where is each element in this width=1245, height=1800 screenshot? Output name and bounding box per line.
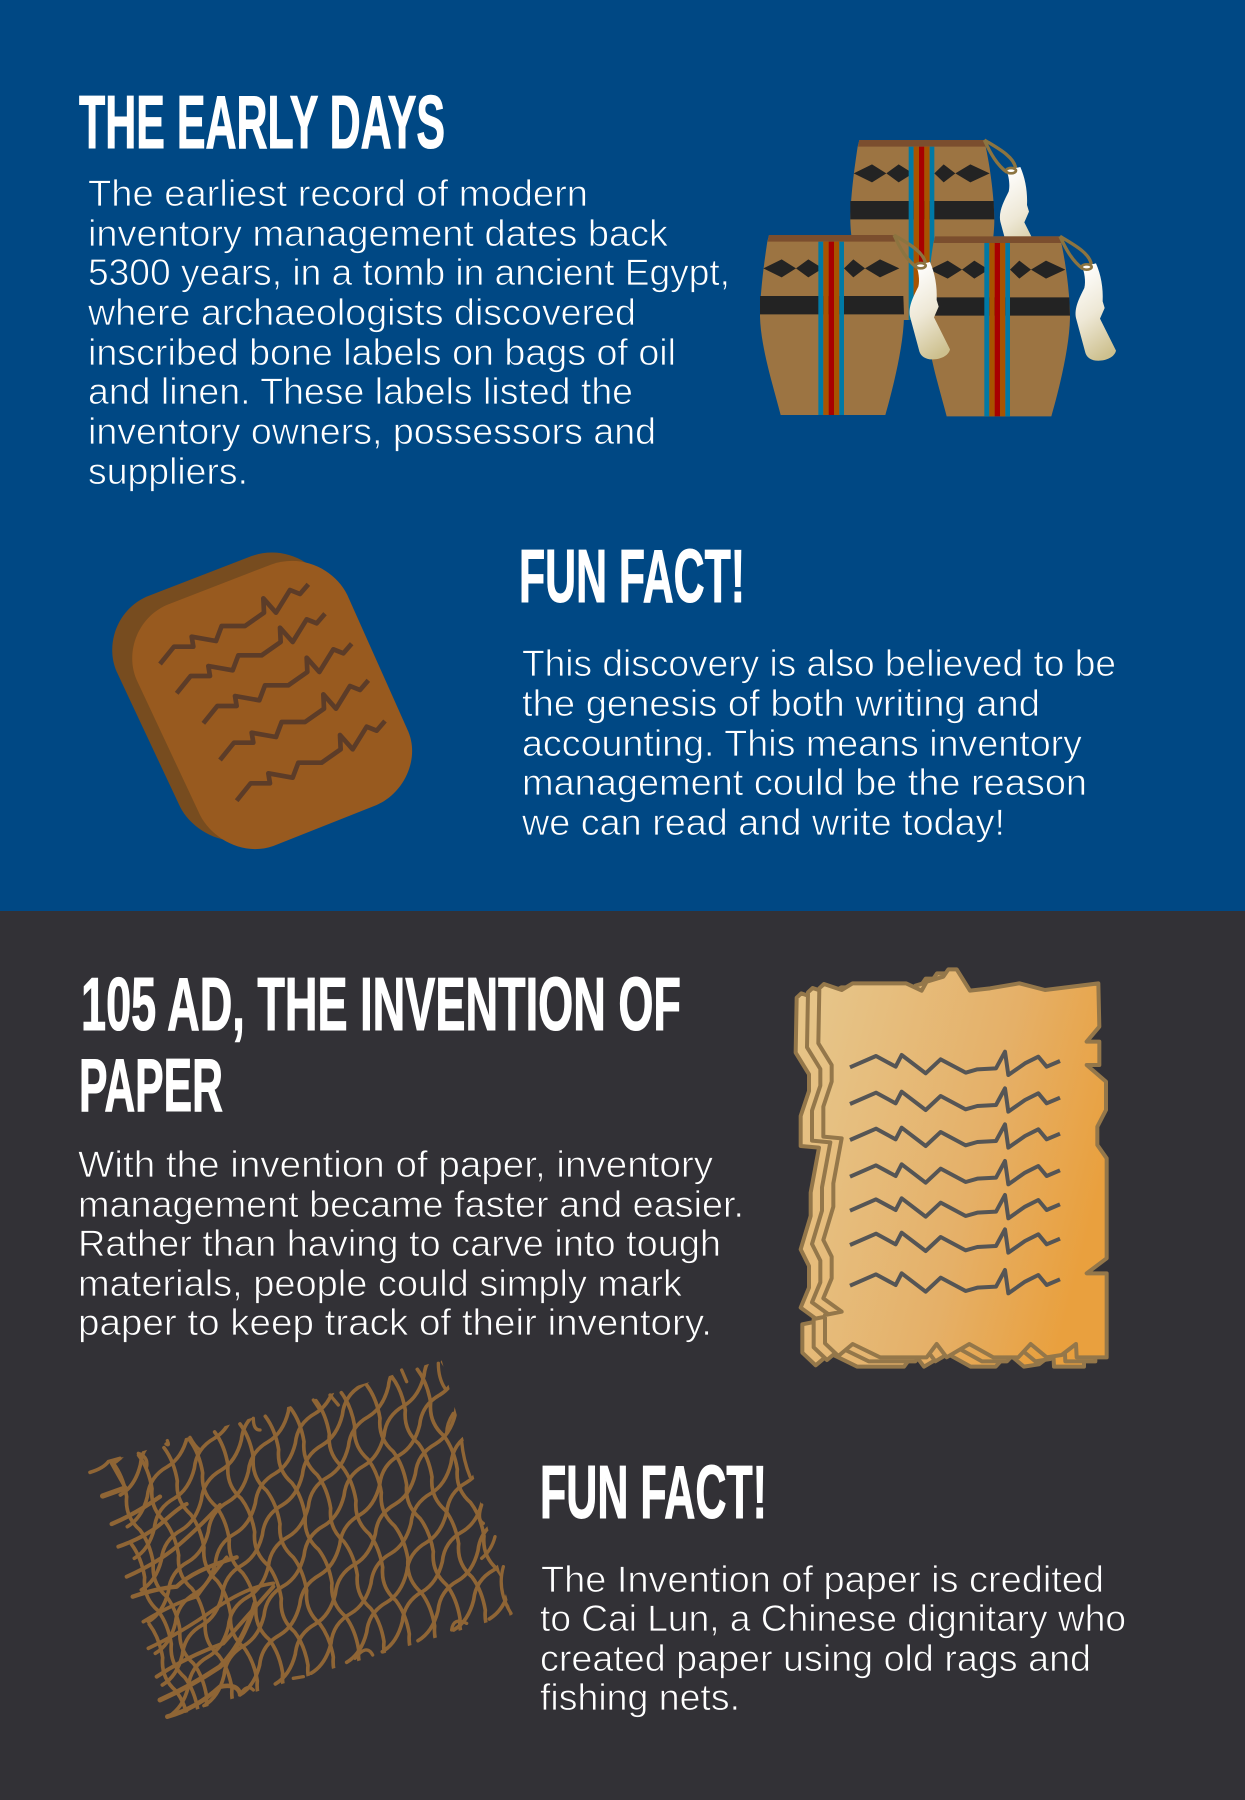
- text block: fun fact 1: [521, 643, 1116, 843]
- text block: fun fact 2: to Cai Lun, a Chinese dignitary who: [540, 1598, 1126, 1639]
- heading: 105 AD, the invention of paper: PAPER: [79, 1043, 223, 1127]
- panel: invention of paper (dark background): [0, 911, 1245, 1800]
- text block: earliest record: inscribed bone labels on bags of oil: [88, 332, 676, 373]
- text block: earliest record: inventory owners, possessors and: [88, 411, 656, 452]
- text block: fun fact 2: [540, 1559, 1126, 1718]
- text block: invention of paper: paper to keep track of their inventory.: [78, 1302, 712, 1343]
- text block: fun fact 1: management could be the reason: [522, 762, 1087, 803]
- text block: earliest record: 5300 years, in a tomb in ancient Egypt,: [88, 252, 730, 293]
- text block: fun fact 1: This discovery is also believed to be: [522, 643, 1116, 684]
- text block: invention of paper: management became faster and easier.: [78, 1184, 744, 1225]
- text block: earliest record: suppliers.: [88, 451, 248, 492]
- text block: fun fact 2: fishing nets.: [540, 1677, 740, 1718]
- text block: invention of paper: With the invention of paper, inventory: [78, 1144, 714, 1185]
- text block: earliest record: inventory management dates back: [88, 213, 669, 254]
- icon: parchment paper: [796, 969, 1107, 1367]
- text block: fun fact 1: the genesis of both writing and: [522, 683, 1040, 724]
- heading: 105 AD, the invention of paper: 105 AD, THE INVENTION OF: [81, 962, 681, 1046]
- icon: clay tablet: [112, 553, 412, 849]
- panel: the early days (blue background): [0, 0, 1245, 911]
- text block: fun fact 2: created paper using old rags and: [540, 1638, 1091, 1679]
- text block: earliest record: [87, 173, 730, 492]
- text block: earliest record: and linen. These labels listed the: [88, 371, 633, 412]
- heading: fun fact 2: FUN FACT!: [540, 1450, 767, 1534]
- icon: fishing net: [88, 1360, 513, 1719]
- heading: The Early Days: THE EARLY DAYS: [79, 80, 445, 164]
- text block: fun fact 1: we can read and write today!: [521, 802, 1005, 843]
- heading: fun fact 1: FUN FACT!: [519, 534, 745, 618]
- text block: invention of paper: Rather than having to carve into tough: [78, 1223, 721, 1264]
- text block: earliest record: The earliest record of modern: [88, 173, 588, 214]
- text block: invention of paper: [78, 1144, 744, 1343]
- text block: earliest record: where archaeologists discovered: [87, 292, 636, 333]
- icon: three bags with bone labels: [760, 140, 1116, 416]
- text block: fun fact 2: The Invention of paper is credited: [541, 1559, 1104, 1600]
- heading: 105 AD, the invention of paper: [79, 962, 681, 1127]
- text block: fun fact 1: accounting. This means inventory: [522, 723, 1082, 764]
- text block: invention of paper: materials, people could simply mark: [78, 1263, 683, 1304]
